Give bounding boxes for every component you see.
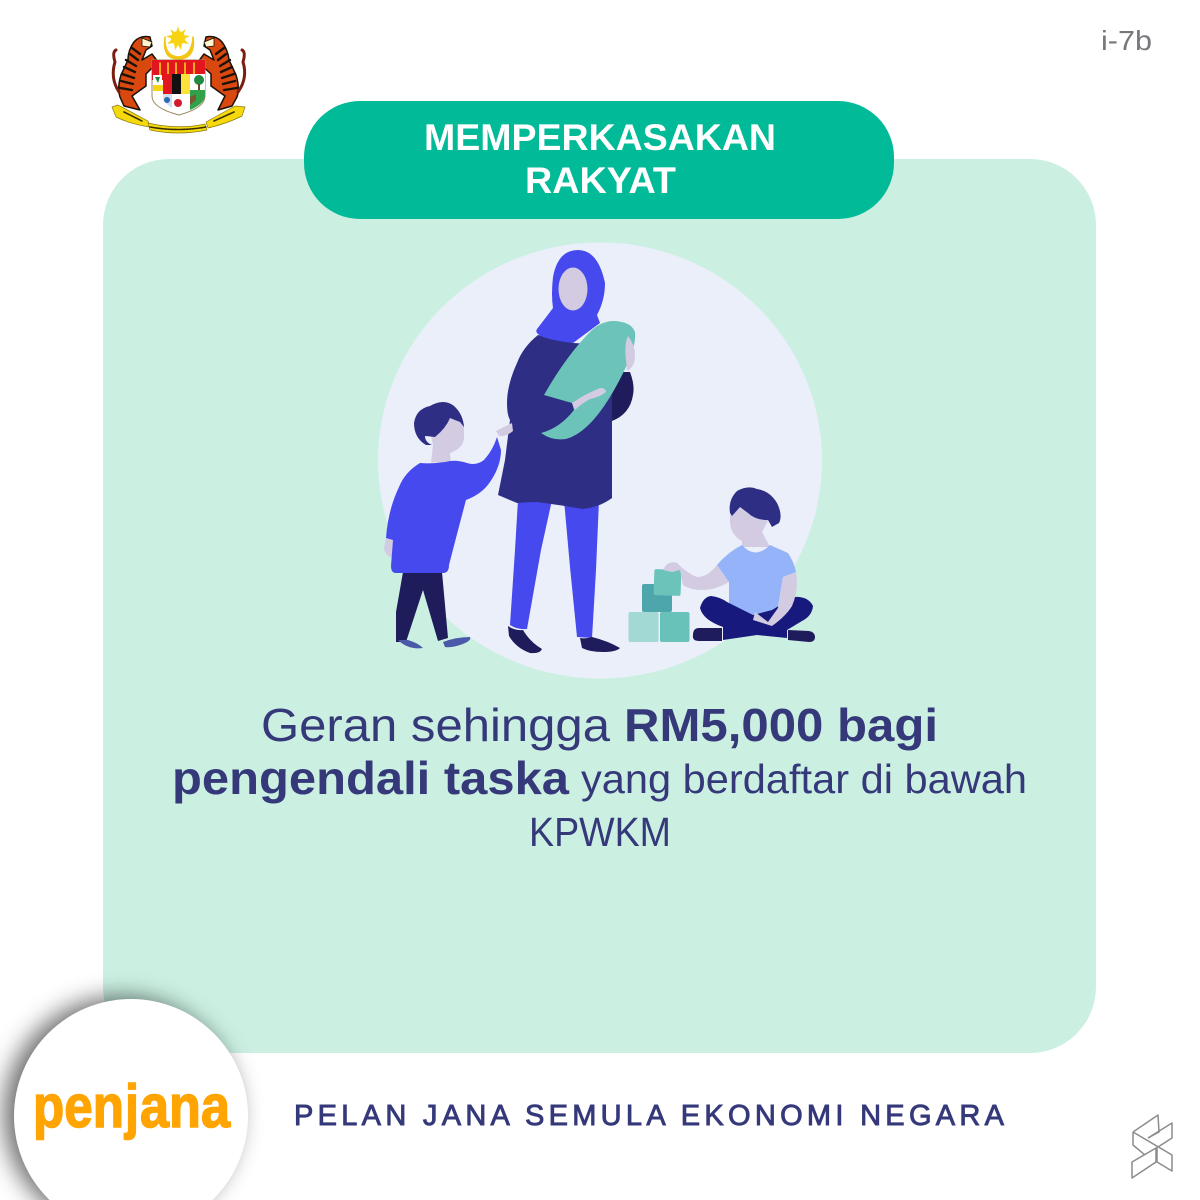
boy neck and face <box>430 416 464 464</box>
mother shoes <box>508 626 620 653</box>
illustration circle <box>378 242 822 678</box>
seated boy t-shirt <box>717 545 796 615</box>
illustration: standing boy <box>384 402 513 648</box>
crescent and sun <box>165 26 193 59</box>
body text: pengendali taska <box>172 752 569 804</box>
illustration: mother with baby <box>498 250 635 653</box>
body text: Geran sehingga <box>261 699 610 751</box>
boy sweater <box>386 437 501 573</box>
seated boy trousers <box>700 596 813 640</box>
boy shoes <box>398 637 470 648</box>
ribbon <box>112 105 150 127</box>
boy left hand <box>384 537 396 558</box>
left tiger <box>119 37 158 110</box>
penjana logo badge: j <box>124 1073 139 1140</box>
mother legs <box>510 500 599 638</box>
face <box>558 268 588 310</box>
heading pill: RAKYAT <box>525 160 676 201</box>
far arm <box>604 372 634 421</box>
icon: Malaysian coat of arms <box>112 26 245 133</box>
body text: yang berdaftar di bawah <box>581 756 1027 802</box>
seated boy shoes <box>693 628 815 642</box>
boy raised hand <box>496 423 513 436</box>
seated boy face and neck <box>730 507 770 547</box>
penjana logo badge <box>4 997 248 1200</box>
seated boy other arm <box>753 572 797 626</box>
mother hand lower <box>572 388 606 410</box>
seated boy hair <box>730 487 781 527</box>
shield <box>152 60 205 115</box>
body text: KPWKM <box>529 809 671 855</box>
body text: RM5,000 bagi <box>624 699 938 751</box>
baby blanket <box>541 321 635 439</box>
heading pill: MEMPERKASAKAN <box>424 117 776 158</box>
seated boy arm and hand <box>663 562 729 590</box>
panel: main mint card <box>103 159 1096 1053</box>
icon: publisher mark <box>1132 1115 1172 1178</box>
penjana logo badge: ana <box>140 1073 231 1140</box>
mother hand top <box>625 336 635 371</box>
mother dress <box>498 335 612 509</box>
code label: i-7b <box>1101 25 1152 56</box>
heading pill <box>304 101 894 219</box>
illustration: toy blocks <box>628 569 690 642</box>
body text <box>172 699 1027 855</box>
right tiger <box>198 37 238 110</box>
hijab <box>536 250 605 343</box>
boy hair <box>414 402 464 445</box>
penjana logo badge: pen <box>33 1073 124 1140</box>
boy trousers <box>396 572 448 642</box>
illustration: seated boy <box>663 487 815 642</box>
footer tagline: PELAN JANA SEMULA EKONOMI NEGARA <box>294 1100 1005 1132</box>
